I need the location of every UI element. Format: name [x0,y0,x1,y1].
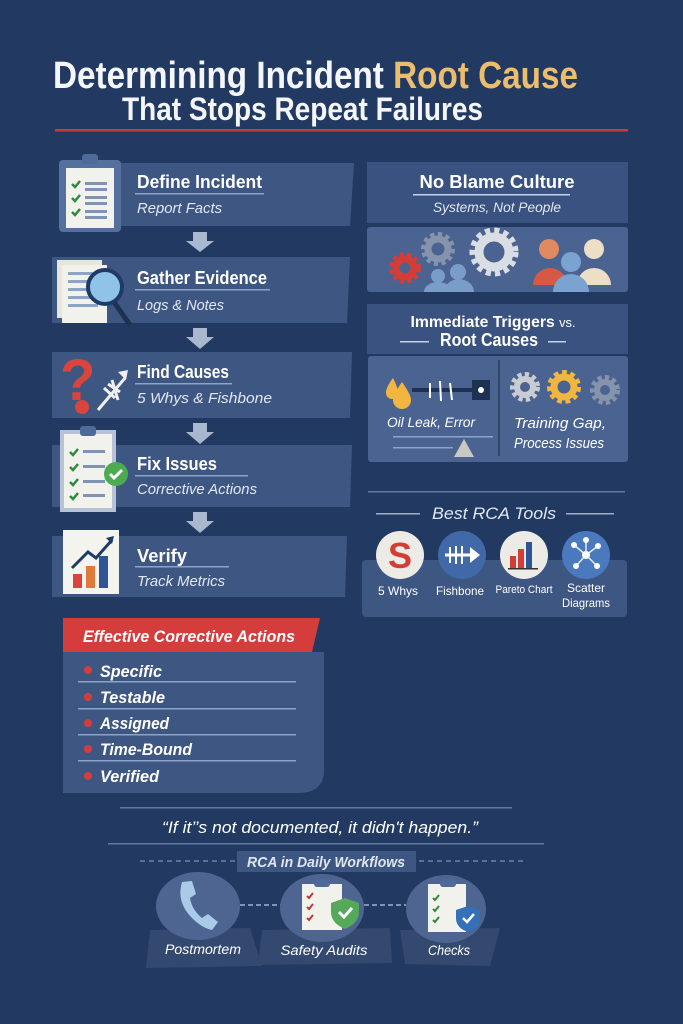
panel: triggers vs root causes: Immediate Triggers vs. [410,314,576,331]
step: gather evidence: Gather Evidence [137,268,267,288]
panel: best rca tools: 5 Whys [378,584,418,598]
icon: documents magnifier [57,260,130,325]
arrow 2 [186,328,214,349]
section: rca in daily workflows: Postmortem [165,941,241,957]
icon: 5 whys: S [388,535,412,576]
step: define incident: Report Facts [137,200,222,217]
step: verify [52,530,347,597]
panel: triggers vs root causes: Training Gap, [514,415,606,432]
title [53,55,578,127]
icon: 5 whys [376,531,424,579]
icon: oil drops and fishbone [386,378,490,409]
section: rca in daily workflows [140,851,523,968]
step: verify: Track Metrics [137,573,225,590]
section: rca in daily workflows: Checks [428,942,470,958]
heading banner [63,618,320,652]
icon: grey gear [424,235,452,263]
icon: safety audits [280,874,364,942]
icon: pareto chart [500,531,548,579]
title: Determining Incident Root Cause [53,55,578,97]
panel: best rca tools: Best RCA Tools [432,504,557,523]
step: fix issues: Fix Issues [137,454,217,474]
panel: triggers vs root causes: Root Causes [440,330,538,350]
step: define incident [59,154,354,232]
step: define incident: Define Incident [137,172,262,192]
panel: effective corrective actions: Specific [100,662,163,681]
icon: blue people [424,264,474,292]
panel: triggers vs root causes [367,304,628,462]
panel: no blame culture: Systems, Not People [433,199,561,215]
section: rca in daily workflows: RCA in Daily Workflows [247,854,405,871]
icon: red gear [392,255,418,281]
panel: gears and people illustration [367,227,628,292]
section: rca in daily workflows: Safety Audits [280,942,368,958]
title: That Stops Repeat Failures [122,91,483,127]
panel: no blame culture [367,162,628,223]
arrow 3 [186,423,214,444]
step: verify: Verify [137,546,187,566]
panel: triggers vs root causes: Oil Leak, Error [387,414,476,430]
panel: triggers vs root causes: Process Issues [514,435,604,452]
step: gather evidence: Logs & Notes [137,297,224,314]
step: fix issues [52,426,352,512]
icon: scatter diagram [562,531,610,579]
quote: “If it’’s not documented, it didn't happen.” [162,818,479,837]
panel: effective corrective actions: Testable [100,688,165,707]
icon: fishbone [438,531,486,579]
panel: best rca tools: Diagrams [562,596,610,610]
icon: big gear [473,231,515,273]
step: fix issues: Corrective Actions [137,481,257,498]
panel: effective corrective actions: Assigned [99,714,170,733]
panel: best rca tools: Scatter [567,581,605,595]
panel: effective corrective actions: Effective Corrective Actions [83,627,295,646]
icon: clipboard [59,154,121,232]
step: find causes: Find Causes [137,362,229,382]
icon: checks [406,875,486,943]
step: find causes [52,348,352,418]
icon: checklist with check badge [60,426,128,512]
panel: effective corrective actions [63,618,324,793]
icon: question mark fishbone: ? [60,348,95,413]
panel: best rca tools [362,491,627,617]
icon: warning tent [454,439,474,457]
step: find causes: 5 Whys & Fishbone [137,390,272,407]
icon: colorful people [533,239,611,292]
panel: effective corrective actions: Verified [100,767,160,786]
icon: three gears [513,373,617,402]
icon: chart [63,530,119,594]
arrow 1 [186,232,214,252]
step: gather evidence [52,257,350,325]
arrow 4 [186,512,214,533]
panel: best rca tools: Fishbone [436,584,484,598]
panel: effective corrective actions: Time-Bound [100,740,193,759]
icon: question mark fishbone [60,348,128,414]
panel: no blame culture: No Blame Culture [420,172,574,192]
icon: phone postmortem [156,872,240,940]
panel: best rca tools: Pareto Chart [496,584,552,596]
